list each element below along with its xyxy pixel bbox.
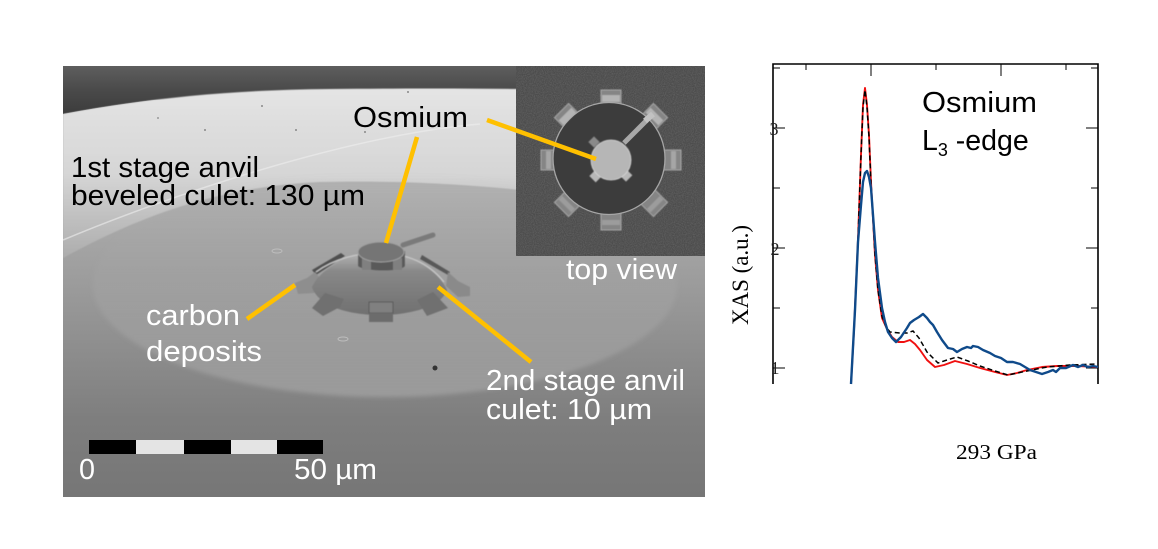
label: scale bar 50 um: 50 µm [294, 454, 377, 486]
central pillar [588, 136, 632, 182]
anvil second stage dome [295, 235, 470, 322]
scale bar [89, 440, 323, 454]
gear body [553, 102, 665, 214]
gear tabs [541, 90, 681, 230]
chart axes [773, 64, 1098, 384]
y axis title: XAS (a.u.) [728, 225, 753, 325]
label: carbon deposits: deposits [146, 336, 262, 368]
needle [403, 235, 433, 245]
label: carbon deposits [146, 300, 262, 368]
curve: black dashed [851, 90, 1098, 384]
back tabs [312, 253, 345, 275]
chart label: pressure: 293 GPa [956, 440, 1038, 464]
arm [624, 120, 647, 143]
chart label: L3-edge: -edge [948, 125, 1029, 157]
chart label: L3-edge: L [922, 125, 938, 157]
micrograph background [63, 66, 705, 497]
label: 1st stage anvil beveled culet: 1st stage anvil [71, 152, 259, 184]
arrow: carbon deposits [247, 285, 295, 319]
chart label: L3-edge: 3 [938, 140, 948, 160]
panel: SEM micrograph of the anvil [63, 66, 705, 497]
top pillar [358, 251, 405, 271]
arrow: 2nd stage anvil [438, 287, 531, 362]
label: scale bar 0: 0 [79, 454, 95, 486]
curve: blue [851, 171, 1098, 384]
arrow: Osmium to side view [386, 137, 417, 243]
label: 1st stage anvil beveled culet: beveled culet: 130 µm [71, 180, 365, 212]
curve: red [851, 88, 1098, 384]
front tabs [312, 293, 344, 316]
arrow: Osmium to top view [487, 120, 596, 159]
y axis tick labels [770, 119, 780, 378]
chart: XAS spectra [728, 64, 1098, 464]
y axis tick labels: 1 [770, 358, 780, 378]
label: 1st stage anvil beveled culet [71, 152, 365, 212]
label: 2nd stage anvil culet [486, 365, 685, 426]
side tabs [295, 272, 320, 294]
y axis tick labels: 3 [770, 119, 778, 139]
y axis tick labels: 2 [770, 239, 780, 259]
label: carbon deposits: carbon [146, 300, 240, 332]
tab inner highlights [546, 95, 676, 225]
chart label: Osmium: Osmium [922, 87, 1037, 119]
label: 2nd stage anvil culet: culet: 10 µm [486, 394, 652, 426]
dome [312, 253, 447, 315]
label: 2nd stage anvil culet: 2nd stage anvil [486, 365, 685, 397]
label: Osmium: Osmium [353, 102, 468, 134]
label: top view: top view [566, 254, 677, 286]
inset: top view micrograph [516, 66, 705, 256]
